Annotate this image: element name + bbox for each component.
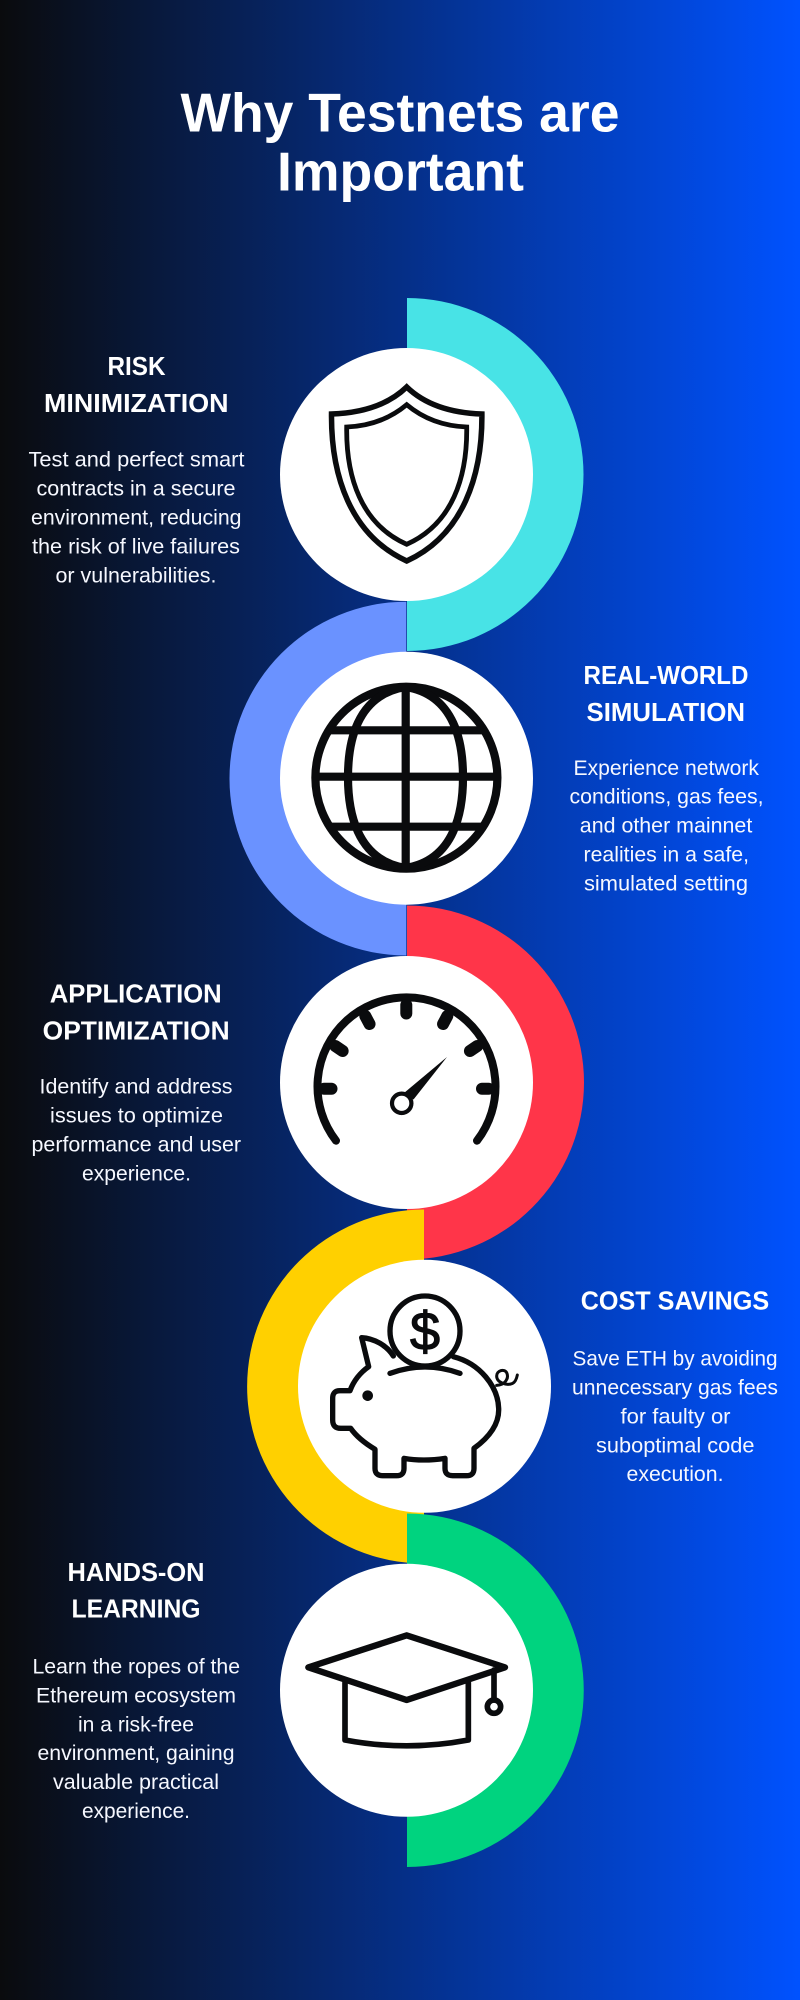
icon: shield bbox=[331, 387, 482, 561]
heading: risk minimization: RISK bbox=[108, 351, 166, 381]
text: risk minimization: contracts in a secure bbox=[36, 478, 235, 501]
heading: risk minimization bbox=[44, 351, 228, 418]
title: Important bbox=[277, 140, 524, 202]
text: application optimization: issues to optimize bbox=[50, 1105, 223, 1128]
half ring: red bbox=[407, 906, 584, 1260]
text: risk minimization: environment, reducing bbox=[31, 506, 242, 530]
heading: hands-on learning bbox=[68, 1557, 204, 1624]
title bbox=[180, 82, 620, 202]
icon: graduation cap bbox=[308, 1635, 505, 1746]
text: cost savings: suboptimal code bbox=[596, 1434, 754, 1457]
text: hands-on learning bbox=[32, 1655, 240, 1823]
text: application optimization: performance and user bbox=[32, 1134, 241, 1157]
half ring: green bbox=[407, 1514, 584, 1867]
heading: cost savings: COST SAVINGS bbox=[581, 1285, 769, 1315]
white circle bbox=[280, 348, 533, 601]
white circle bbox=[298, 1260, 551, 1513]
icon: globe bbox=[315, 687, 498, 869]
white circle bbox=[280, 1564, 533, 1817]
text: cost savings: for faulty or bbox=[620, 1405, 731, 1428]
text: cost savings: execution. bbox=[626, 1463, 724, 1486]
text: cost savings: Save ETH by avoiding bbox=[572, 1347, 778, 1370]
white circle bbox=[280, 956, 533, 1209]
title: Why Testnets are bbox=[180, 82, 620, 144]
text: cost savings: unnecessary gas fees bbox=[572, 1376, 778, 1399]
text: real-world simulation: conditions, gas fees, bbox=[570, 786, 764, 809]
text: real-world simulation bbox=[570, 757, 764, 896]
text: hands-on learning: environment, gaining bbox=[38, 1742, 234, 1765]
white circle bbox=[280, 652, 533, 905]
text: hands-on learning: valuable practical bbox=[53, 1771, 219, 1794]
text: real-world simulation: and other mainnet bbox=[580, 815, 752, 838]
half ring: yellow bbox=[247, 1210, 424, 1564]
text: risk minimization: or vulnerabilities. bbox=[56, 564, 216, 587]
panel: risk minimization bbox=[28, 298, 584, 651]
panel: cost savings bbox=[247, 1210, 778, 1564]
heading: risk minimization: MINIMIZATION bbox=[44, 388, 228, 418]
heading: hands-on learning: LEARNING bbox=[72, 1594, 200, 1624]
heading: hands-on learning: HANDS-ON bbox=[68, 1557, 204, 1587]
text: hands-on learning: Ethereum ecosystem bbox=[36, 1684, 236, 1707]
text: risk minimization bbox=[28, 449, 245, 587]
heading: real-world simulation: SIMULATION bbox=[586, 697, 745, 727]
text: real-world simulation: realities in a safe, bbox=[584, 844, 749, 867]
half ring: teal bbox=[407, 298, 584, 651]
text: real-world simulation: simulated setting bbox=[584, 873, 748, 896]
panel: application optimization bbox=[32, 906, 584, 1260]
text: risk minimization: the risk of live failures bbox=[32, 535, 240, 558]
heading: real-world simulation bbox=[584, 660, 748, 727]
text: real-world simulation: Experience network bbox=[574, 757, 759, 780]
text: application optimization: Identify and address bbox=[40, 1076, 232, 1099]
heading: real-world simulation: REAL-WORLD bbox=[584, 660, 748, 690]
text: application optimization: experience. bbox=[82, 1163, 191, 1186]
text: risk minimization: Test and perfect smart bbox=[28, 449, 245, 472]
half ring: blue bbox=[229, 602, 406, 956]
icon: piggy bank bbox=[333, 1296, 517, 1476]
text: cost savings bbox=[572, 1347, 778, 1486]
heading: application optimization: APPLICATION bbox=[50, 978, 222, 1008]
panel: hands-on learning bbox=[32, 1514, 584, 1867]
icon: piggy bank: $ bbox=[410, 1302, 440, 1362]
text: application optimization bbox=[32, 1076, 241, 1186]
icon: speedometer bbox=[318, 997, 496, 1141]
text: hands-on learning: experience. bbox=[82, 1800, 190, 1823]
text: hands-on learning: Learn the ropes of the bbox=[32, 1655, 240, 1678]
text: hands-on learning: in a risk-free bbox=[78, 1713, 194, 1736]
heading: application optimization bbox=[43, 978, 230, 1045]
panel: real-world simulation bbox=[229, 602, 764, 956]
heading: application optimization: OPTIMIZATION bbox=[43, 1015, 230, 1045]
